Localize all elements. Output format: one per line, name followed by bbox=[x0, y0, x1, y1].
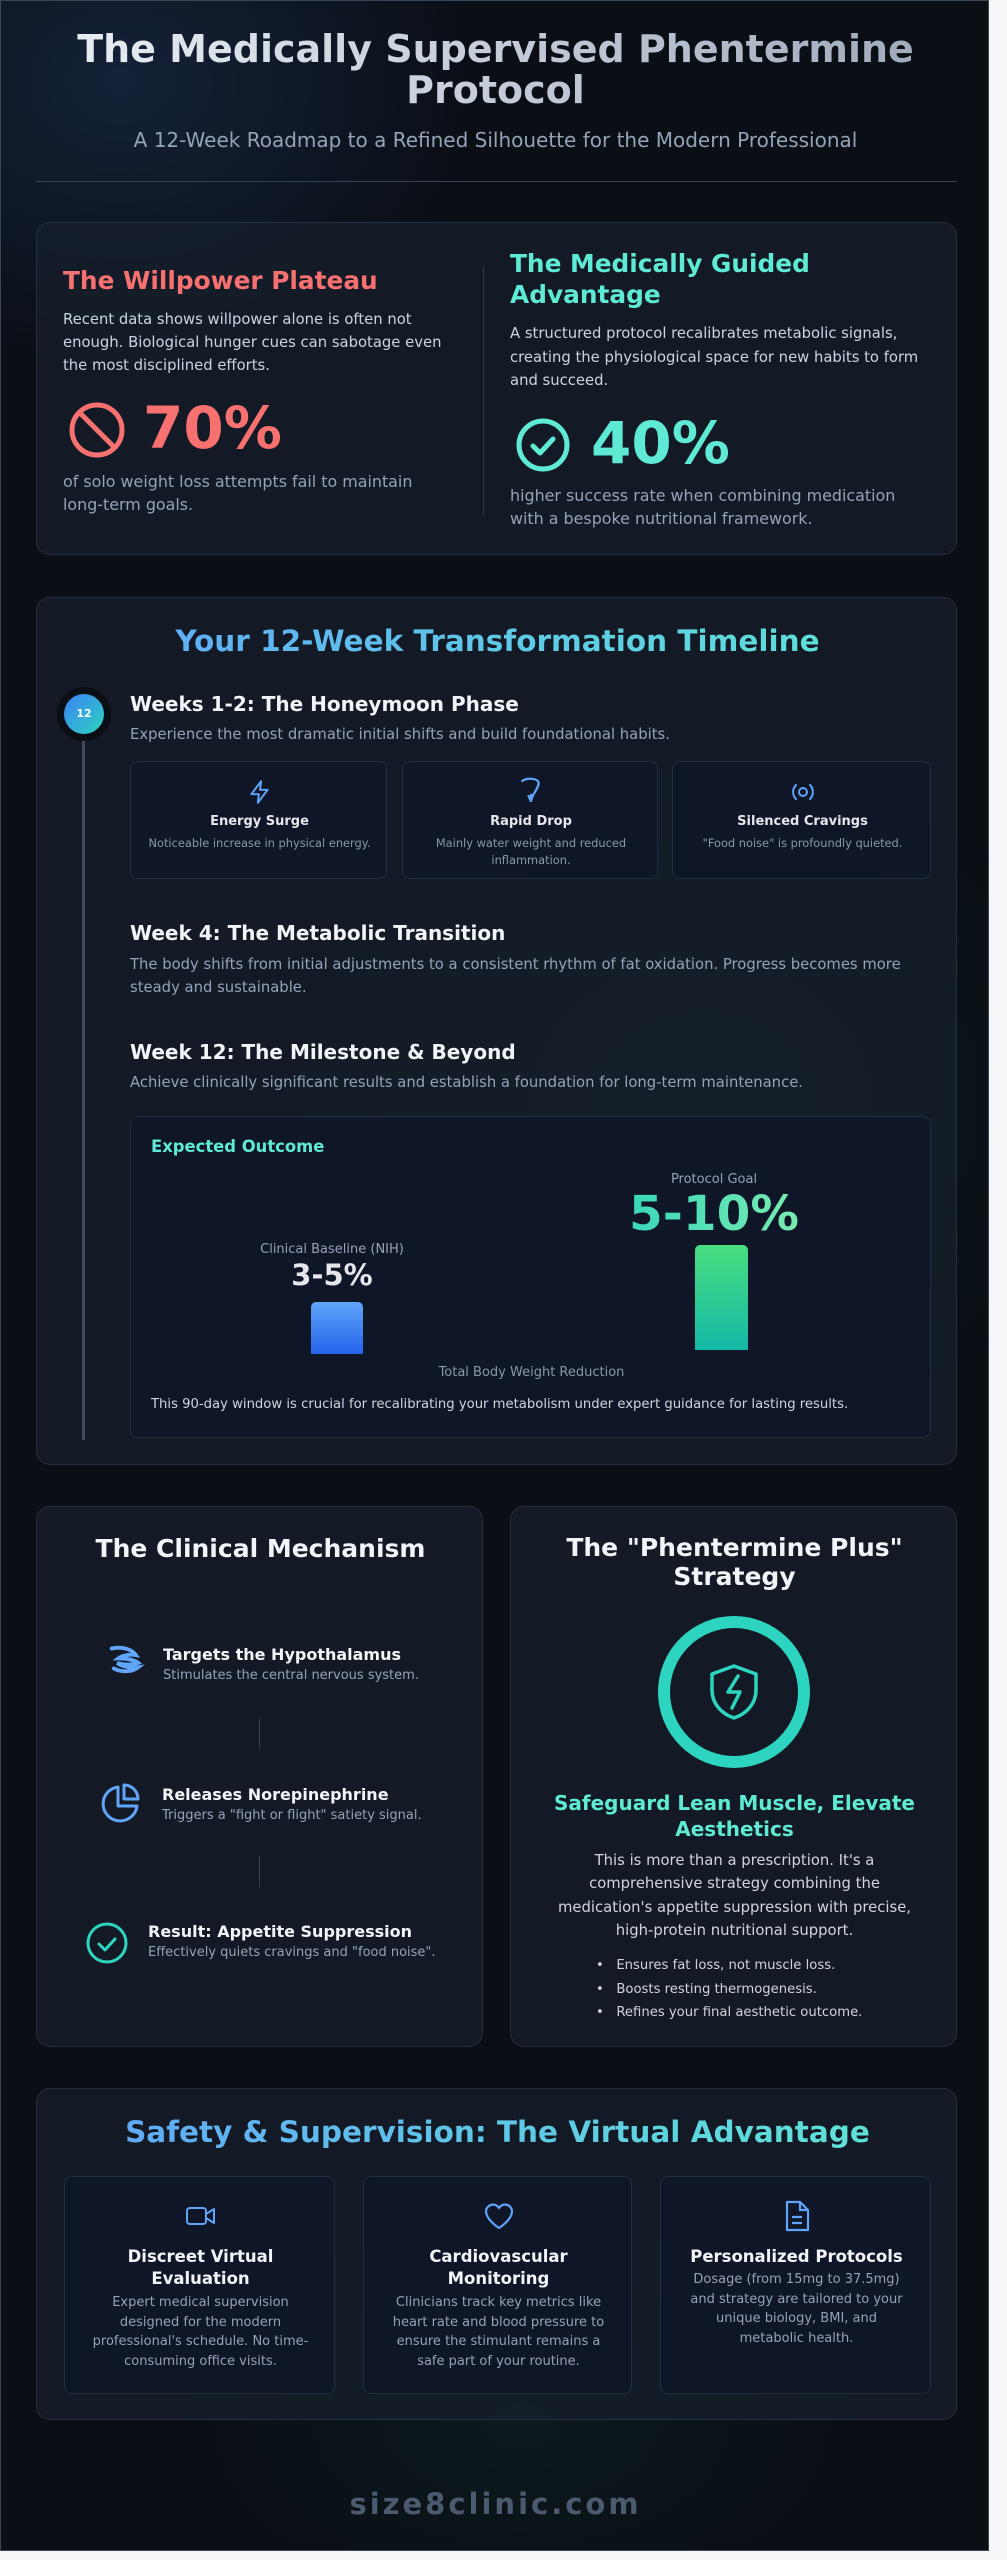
card: virtual evaluation: professional's schedule. No time- bbox=[93, 2334, 308, 2349]
icon: timeline marker 12 bbox=[57, 687, 111, 741]
card: silenced cravings bbox=[672, 761, 931, 879]
list: benefits: • Ensures fat loss, not muscle loss. bbox=[596, 1958, 835, 1973]
card: virtual evaluation: Expert medical supervision bbox=[112, 2295, 289, 2310]
text: strategy body: This is more than a prescription. It's a bbox=[595, 1852, 874, 1869]
text: willpower body bbox=[63, 311, 441, 374]
panel: safety & supervision bbox=[36, 2088, 957, 2420]
heading: timeline title: Your 12-Week Transformation Timeline bbox=[175, 624, 820, 658]
card: energy surge bbox=[130, 761, 387, 879]
subtitle: A 12-Week Roadmap to a Refined Silhouette for the Modern Professional bbox=[134, 128, 857, 152]
card: virtual evaluation: consuming office visits. bbox=[124, 2354, 277, 2368]
list: benefits: • Refines your final aesthetic outcome. bbox=[596, 2005, 862, 2020]
footer: site: size8clinic.com bbox=[349, 2487, 642, 2521]
heading: willpower plateau: The Willpower Plateau bbox=[63, 266, 378, 295]
step: hypothalamus: Stimulates the central nervous system. bbox=[163, 1668, 419, 1683]
heading: medically guided bbox=[510, 249, 810, 309]
caption: 70%: long-term goals. bbox=[63, 495, 193, 514]
icon: check circle bbox=[516, 418, 570, 472]
heading: phentermine plus: Strategy bbox=[673, 1562, 796, 1591]
caption: 40% bbox=[510, 486, 895, 528]
text: strategy body bbox=[558, 1852, 911, 1939]
text: strategy body: medication's appetite suppression with precise, bbox=[558, 1899, 911, 1916]
card: cardiovascular bbox=[363, 2176, 632, 2394]
step: appetite suppression: Result: Appetite Suppression bbox=[148, 1922, 412, 1941]
step: hypothalamus: Targets the Hypothalamus bbox=[163, 1645, 401, 1664]
bar: clinical baseline: Clinical Baseline (NIH) bbox=[260, 1242, 404, 1257]
step: norepinephrine bbox=[102, 1784, 422, 1823]
card: cardiovascular: Cardiovascular bbox=[429, 2247, 568, 2266]
heading: safety: Safety & Supervision: The Virtual Advantage bbox=[125, 2115, 870, 2149]
card: personalized protocols: Personalized Protocols bbox=[690, 2247, 903, 2266]
chart: expected outcome: Total Body Weight Reduction bbox=[439, 1365, 624, 1380]
text: guided body bbox=[510, 325, 918, 389]
card: rapid drop: Rapid Drop bbox=[490, 814, 572, 829]
text: weeks 1-2 desc: Experience the most dramatic initial shifts and build foundational habits. bbox=[130, 726, 670, 743]
text: guided body: and succeed. bbox=[510, 372, 608, 389]
stat: 40%: 40% bbox=[591, 409, 730, 477]
subheading: safeguard: Safeguard Lean Muscle, Elevate bbox=[554, 1791, 915, 1815]
text: guided body: A structured protocol recalibrates metabolic signals, bbox=[510, 325, 897, 342]
heading: timeline title bbox=[37, 622, 958, 660]
panel: clinical mechanism bbox=[36, 1506, 483, 2047]
card: cardiovascular: heart rate and blood pressure to bbox=[393, 2314, 604, 2330]
chart: expected outcome bbox=[130, 1116, 931, 1438]
card: personalized protocols bbox=[660, 2176, 931, 2394]
caption: 70% bbox=[63, 472, 412, 514]
title bbox=[1, 29, 990, 111]
card: cardiovascular: ensure the stimulant remains a bbox=[397, 2334, 600, 2349]
card: energy surge: Noticeable increase in physical energy. bbox=[148, 836, 371, 850]
heading: medically guided: The Medically Guided bbox=[510, 249, 810, 278]
caption: 40%: with a bespoke nutritional framework. bbox=[510, 508, 813, 528]
caption: 40%: higher success rate when combining medication bbox=[510, 486, 895, 505]
card: cardiovascular: safe part of your routine. bbox=[417, 2354, 580, 2368]
panel: timeline bbox=[36, 597, 957, 1465]
text: willpower body: the most disciplined efforts. bbox=[63, 357, 270, 374]
text: week 4 desc bbox=[130, 956, 901, 996]
card: energy surge: Energy Surge bbox=[210, 814, 309, 829]
text: willpower body: Recent data shows willpower alone is often not bbox=[63, 311, 412, 328]
icon: ban bbox=[70, 402, 124, 458]
icon: video bbox=[186, 2207, 215, 2225]
step: appetite suppression bbox=[86, 1922, 436, 1964]
text: strategy body: comprehensive strategy combining the bbox=[589, 1875, 880, 1892]
step: norepinephrine: Releases Norepinephrine bbox=[162, 1785, 389, 1804]
card: rapid drop bbox=[402, 761, 658, 879]
icon: signal bbox=[792, 784, 814, 800]
card: personalized protocols: metabolic health. bbox=[740, 2330, 853, 2346]
bar: clinical baseline: 3-5% bbox=[291, 1258, 373, 1292]
chart: expected outcome: Expected Outcome bbox=[151, 1137, 324, 1156]
icon: document bbox=[786, 2200, 810, 2232]
card: cardiovascular: Monitoring bbox=[448, 2269, 549, 2288]
icon: bolt bbox=[250, 780, 269, 804]
heading: phentermine plus: The "Phentermine Plus" bbox=[566, 1533, 903, 1562]
bar: protocol goal: Protocol Goal bbox=[671, 1172, 757, 1187]
card: silenced cravings: "Food noise" is profoundly quieted. bbox=[703, 836, 902, 850]
title: Protocol bbox=[406, 68, 585, 112]
card: personalized protocols: and strategy are tailored to your bbox=[690, 2292, 903, 2306]
icon: timeline marker 12: 12 bbox=[76, 707, 92, 720]
list: benefits: • Boosts resting thermogenesis. bbox=[596, 1982, 817, 1996]
icon: drop bbox=[521, 778, 540, 802]
card: personalized protocols: Dosage (from 15mg to 37.5mg) bbox=[693, 2272, 900, 2287]
icon: shield ring bbox=[658, 1616, 810, 1768]
card: cardiovascular: Clinicians track key metrics like bbox=[396, 2295, 601, 2310]
subheading: safeguard: Aesthetics bbox=[675, 1817, 794, 1841]
bar: protocol goal: 5-10% bbox=[629, 1186, 799, 1242]
card: rapid drop: Mainly water weight and reduced bbox=[436, 836, 626, 850]
step: norepinephrine: Triggers a "fight or flight" satiety signal. bbox=[162, 1808, 422, 1823]
heading: clinical mechanism: The Clinical Mechanism bbox=[96, 1534, 425, 1563]
text: willpower body: enough. Biological hunger cues can sabotage even bbox=[63, 334, 441, 351]
icon: heart bbox=[484, 2204, 514, 2230]
bar: clinical baseline bbox=[260, 1242, 404, 1354]
heading: week 12: Week 12: The Milestone & Beyond bbox=[130, 1040, 516, 1064]
chart: expected outcome: This 90-day window is crucial for recalibrating your metabolism under expert guidance for lasting results. bbox=[151, 1397, 848, 1412]
card: virtual evaluation: designed for the modern bbox=[120, 2314, 281, 2330]
card: personalized protocols: unique biology, BMI, and bbox=[716, 2311, 877, 2326]
step: hypothalamus bbox=[110, 1645, 419, 1683]
heading: safety bbox=[37, 2112, 958, 2152]
stat: 70%: 70% bbox=[143, 394, 282, 462]
heading: weeks 1-2: Weeks 1-2: The Honeymoon Phase bbox=[130, 692, 519, 716]
subheading: safeguard bbox=[554, 1791, 915, 1841]
card: silenced cravings: Silenced Cravings bbox=[737, 814, 868, 829]
card: virtual evaluation bbox=[64, 2176, 335, 2394]
text: guided body: creating the physiological space for new habits to form bbox=[510, 348, 918, 366]
text: week 4 desc: The body shifts from initial adjustments to a consistent rhythm of fat oxidation. Progress becomes more bbox=[130, 956, 901, 973]
step: appetite suppression: Effectively quiets cravings and "food noise". bbox=[148, 1945, 436, 1960]
text: strategy body: high-protein nutritional support. bbox=[616, 1922, 853, 1939]
heading: phentermine plus bbox=[566, 1533, 903, 1591]
panel: willpower vs medically guided bbox=[36, 222, 957, 555]
heading: medically guided: Advantage bbox=[510, 280, 661, 309]
bar: protocol goal bbox=[629, 1172, 799, 1350]
text: week 12 desc: Achieve clinically significant results and establish a foundation for long-term maintenance. bbox=[130, 1074, 803, 1091]
card: rapid drop: inflammation. bbox=[491, 853, 571, 867]
panel: phentermine plus bbox=[510, 1506, 957, 2047]
title: The Medically Supervised Phentermine bbox=[77, 27, 914, 71]
heading: week 4: Week 4: The Metabolic Transition bbox=[130, 921, 505, 945]
caption: 70%: of solo weight loss attempts fail to maintain bbox=[63, 472, 412, 491]
card: virtual evaluation: Evaluation bbox=[151, 2269, 250, 2288]
list: benefits bbox=[596, 1958, 862, 2020]
text: week 4 desc: steady and sustainable. bbox=[130, 979, 307, 996]
card: virtual evaluation: Discreet Virtual bbox=[128, 2247, 273, 2266]
